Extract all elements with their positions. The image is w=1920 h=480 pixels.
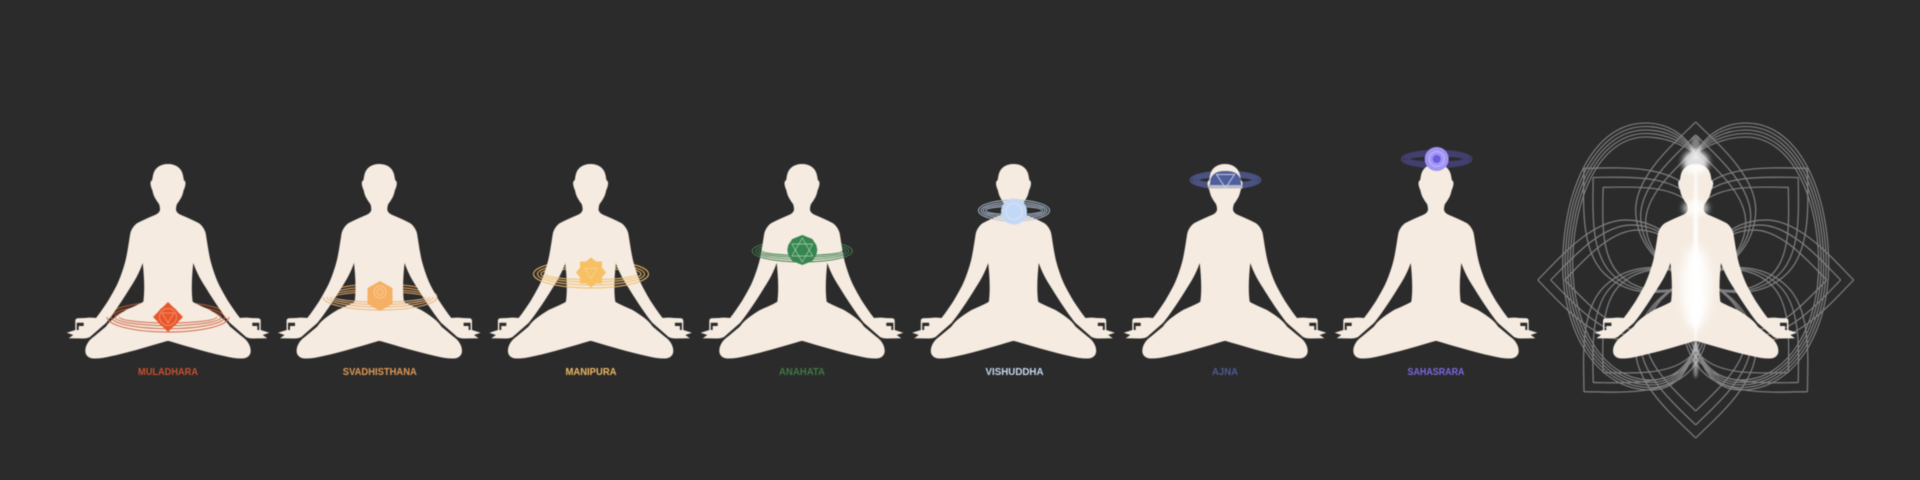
icon: Muladhara chakra <box>153 302 183 332</box>
panel: Sahasrara figure <box>1335 147 1537 378</box>
central energy glow <box>1681 136 1711 378</box>
icon: Svadhisthana chakra <box>368 281 392 311</box>
icon: Anahata chakra <box>787 235 817 265</box>
panel: Muladhara figure <box>67 164 269 378</box>
silhouette: Manipura <box>489 164 692 358</box>
rings behind body: Svadhisthana <box>323 284 437 297</box>
rings in front: Svadhisthana <box>323 297 437 310</box>
rings: Vishuddha <box>978 200 1050 221</box>
silhouette: Anahata <box>701 164 903 358</box>
rings in front: Anahata <box>752 251 852 262</box>
rings in front: Manipura <box>534 274 648 288</box>
panel: Ajna figure <box>1124 164 1326 378</box>
panel: Anahata figure <box>701 164 903 378</box>
energy field loops <box>1563 123 1829 390</box>
icon: Ajna chakra <box>1208 171 1242 188</box>
silhouette: Muladhara <box>67 164 269 358</box>
panel: Vishuddha figure <box>912 164 1115 378</box>
label: Sahasrara: SAHASRARA <box>1408 367 1464 378</box>
lotus petals <box>1538 122 1854 438</box>
silhouette: Vishuddha <box>912 164 1115 358</box>
silhouette: Sahasrara <box>1335 164 1537 358</box>
icon: Vishuddha chakra <box>1001 198 1027 224</box>
rings behind body: Manipura <box>534 260 648 274</box>
label: Muladhara: MULADHARA <box>138 367 198 378</box>
panel: Manipura figure <box>489 164 692 378</box>
label: Anahata: ANAHATA <box>779 367 825 378</box>
label: Ajna: AJNA <box>1212 367 1238 378</box>
silhouette: Ajna <box>1124 164 1326 358</box>
icon: Sahasrara chakra <box>1425 147 1449 171</box>
silhouette: final figure <box>1594 164 1797 358</box>
silhouette: Svadhisthana <box>278 164 481 358</box>
rings: Sahasrara <box>1402 151 1472 167</box>
label: Vishuddha: VISHUDDHA <box>986 367 1044 378</box>
rings in front: Muladhara <box>107 317 229 332</box>
label: Svadhisthana: SVADHISTHANA <box>343 367 417 378</box>
panel: all chakras aligned with lotus energy field <box>1538 122 1854 438</box>
rings: Ajna <box>1190 172 1260 188</box>
icon: Manipura chakra <box>576 258 606 288</box>
rings behind body: Muladhara <box>107 302 229 317</box>
rings behind body: Anahata <box>752 240 852 251</box>
label: Manipura: MANIPURA <box>566 367 616 378</box>
panel: Svadhisthana figure <box>278 164 481 378</box>
